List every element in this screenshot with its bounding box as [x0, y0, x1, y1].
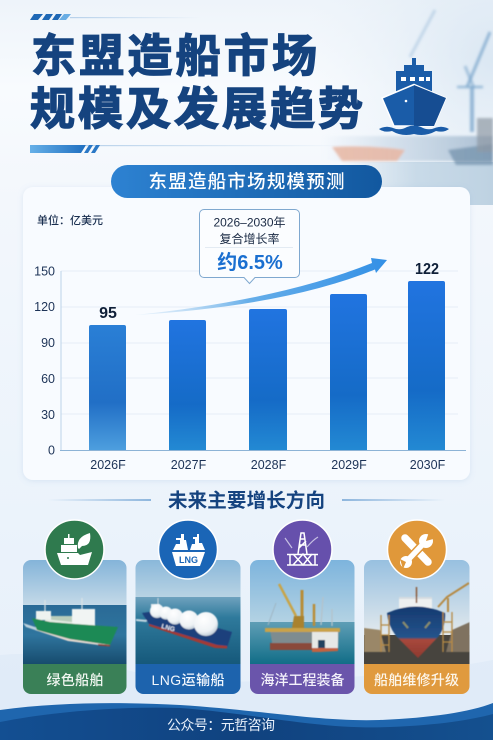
y axis labels: 90 [41, 336, 55, 350]
footer text: 公众号：元哲咨询 [167, 717, 275, 733]
x axis labels: 2030F [410, 458, 446, 472]
title [30, 30, 363, 134]
card: green ships [23, 520, 127, 694]
photo: dry dock ship [364, 583, 470, 658]
unit label: 单位：亿美元 [37, 213, 103, 227]
icon: green ship badge [45, 520, 104, 579]
icon: offshore rig badge [273, 520, 332, 579]
arrow: growth trend [135, 258, 387, 315]
callout: CAGR [200, 210, 300, 284]
title: 规模及发展趋势 [30, 84, 363, 134]
background: shipyard scene [290, 0, 493, 205]
heading pill: 东盟造船市场规模预测 [148, 171, 344, 192]
heading pill [111, 165, 382, 198]
y axis labels: 0 [48, 444, 55, 458]
x axis labels: 2028F [251, 458, 287, 472]
x axis labels: 2027F [171, 458, 207, 472]
panel: chart [23, 187, 470, 480]
icon: LNG badge [158, 520, 218, 579]
card: offshore equipment: 海洋工程装备 [260, 672, 344, 688]
callout: CAGR: 复合增长率 [219, 231, 280, 246]
section heading: 未来主要增长方向 [168, 489, 325, 512]
y axis labels [34, 264, 55, 458]
y axis labels: 120 [34, 300, 55, 314]
x axis labels [90, 458, 446, 472]
header deco top [30, 14, 200, 20]
title: 东盟造船市场 [31, 30, 317, 82]
value labels: 122 [415, 261, 439, 278]
photo: green ship [23, 598, 118, 646]
bottom wave background [0, 654, 493, 740]
photo: LNG ship: LNG [160, 623, 176, 633]
callout: CAGR: 2026–2030年 [213, 216, 286, 230]
card: ship repair [364, 520, 470, 694]
card: offshore equipment [250, 520, 355, 694]
card: LNG carriers: LNG运输船 [152, 672, 224, 688]
y axis labels: 150 [34, 264, 55, 278]
x axis labels: 2026F [90, 458, 126, 472]
icon: tools badge [388, 520, 446, 579]
header deco bottom [30, 145, 350, 153]
x axis labels: 2029F [331, 458, 367, 472]
footer wave [0, 703, 493, 740]
bars [89, 281, 445, 450]
y axis labels: 30 [41, 408, 55, 422]
icon: ship [379, 58, 449, 135]
card: green ships: 绿色船舶 [46, 672, 104, 688]
card: LNG carriers [135, 520, 241, 694]
card: ship repair: 船舶维修升级 [374, 672, 459, 688]
y axis labels: 60 [41, 372, 55, 386]
callout: CAGR: 约6.5% [217, 251, 283, 274]
bar chart [34, 261, 466, 472]
icon: LNG badge: LNG [179, 555, 198, 565]
value labels [99, 261, 439, 322]
value labels: 95 [99, 305, 117, 322]
photo: offshore platform [265, 584, 340, 652]
